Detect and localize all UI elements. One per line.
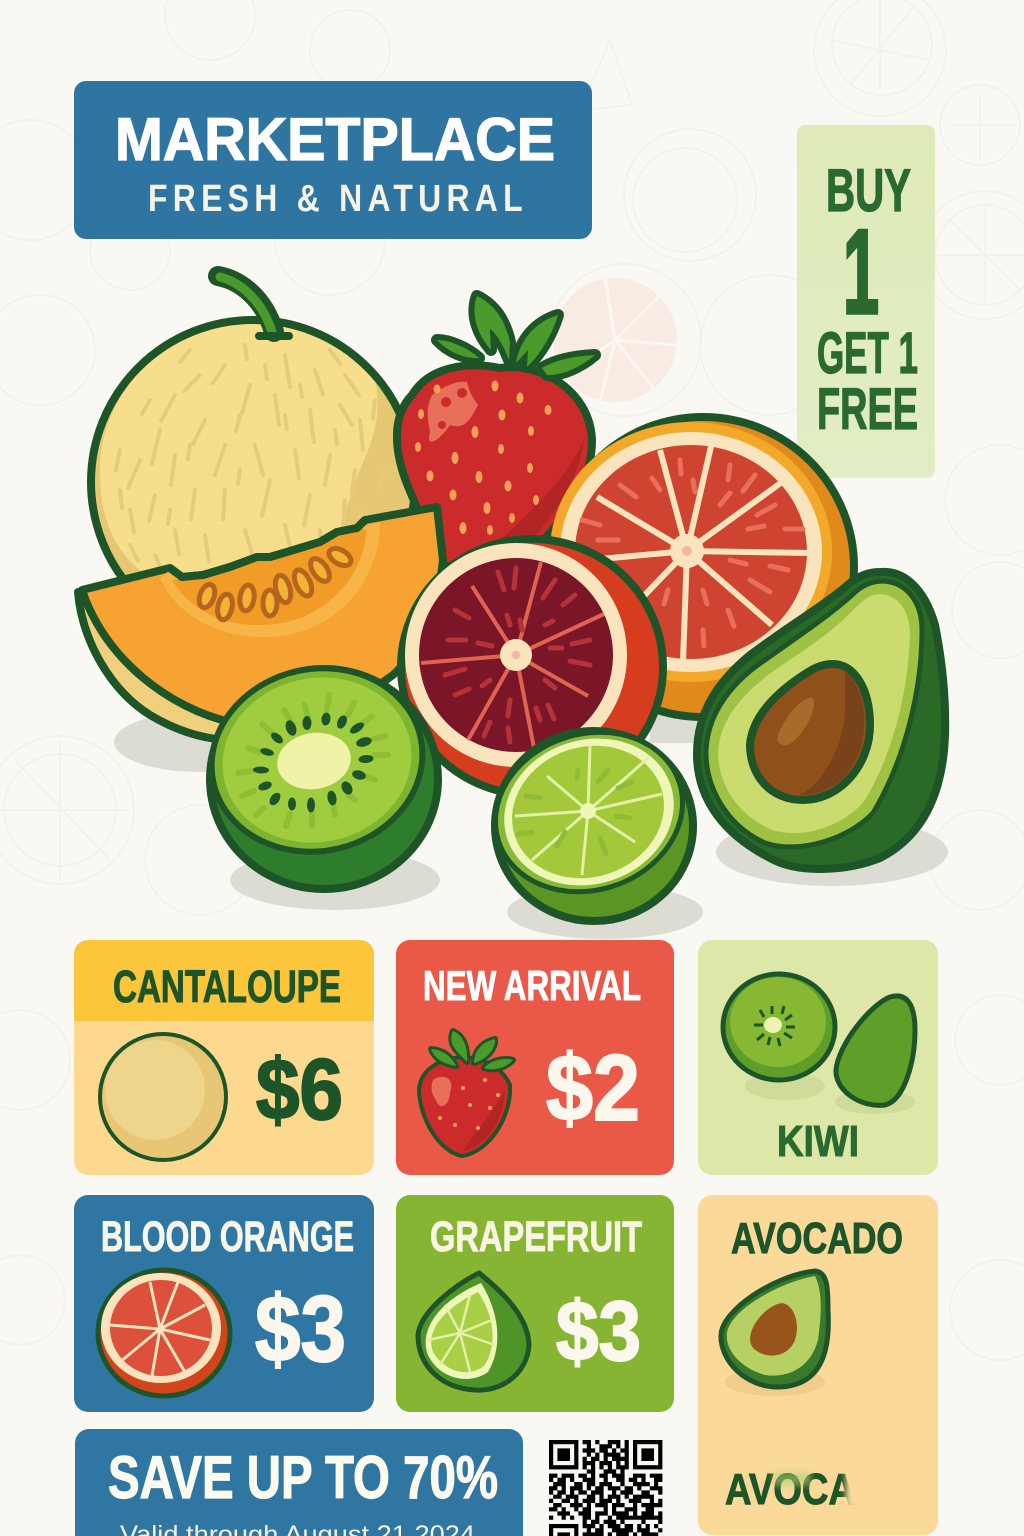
card: grapefruit: GRAPEFRUIT — [430, 1213, 642, 1261]
avocado — [697, 572, 945, 869]
promo badge: buy 1 get 1 free: BUY — [826, 157, 911, 224]
melon seeds — [196, 545, 354, 621]
icon: kiwi and avocado — [723, 974, 915, 1114]
card: new arrival — [396, 940, 674, 1175]
header banner — [74, 81, 592, 239]
card: grapefruit — [396, 1195, 674, 1412]
card: cantaloupe: CANTALOUPE — [113, 961, 341, 1012]
icon: lime wedge — [418, 1273, 529, 1390]
card: blood orange — [74, 1195, 374, 1412]
glitched label: AVOCA: AVOCA — [725, 1465, 855, 1514]
grapefruit — [550, 417, 854, 717]
icon: cantaloupe — [100, 1034, 226, 1160]
kiwi seeds — [253, 712, 374, 812]
strawberry — [397, 296, 595, 575]
kiwi — [194, 649, 440, 889]
icon: strawberry leaves — [437, 296, 595, 375]
card: cantaloupe — [74, 940, 374, 1175]
save banner: SAVE UP TO 70% — [108, 1444, 498, 1511]
card: blood orange: BLOOD ORANGE — [101, 1213, 354, 1261]
card: cantaloupe: $6 — [256, 1042, 343, 1138]
hero fruit shadows — [114, 712, 948, 939]
icon: melon stem — [218, 276, 293, 340]
card: blood orange: $3 — [255, 1276, 346, 1381]
card: kiwi: KIWI — [777, 1117, 859, 1166]
cantaloupe slice — [78, 507, 443, 740]
blood orange — [401, 539, 663, 795]
QR code — [549, 1440, 662, 1536]
card: avocado — [698, 1195, 938, 1535]
subtitle: FRESH & NATURAL: FRESH & NATURAL — [148, 177, 523, 220]
title: MARKETPLACE: MARKETPLACE — [115, 106, 555, 173]
promo badge: buy 1 get 1 free: 1 — [843, 205, 879, 339]
card: grapefruit: $3 — [556, 1284, 641, 1378]
card: avocado: AVOCADO — [731, 1214, 903, 1263]
promo badge: buy 1 get 1 free: FREE — [817, 377, 918, 442]
icon: avocado half — [721, 1271, 828, 1396]
lime — [475, 708, 703, 921]
icon: strawberry — [419, 1031, 513, 1156]
cantaloupe whole — [87, 266, 413, 578]
icon: blood orange slice — [98, 1270, 230, 1396]
promo badge: buy 1 get 1 free — [797, 125, 935, 478]
promo badge: buy 1 get 1 free: GET 1 — [817, 321, 918, 386]
card: new arrival: NEW ARRIVAL — [423, 962, 641, 1009]
card: new arrival: $2 — [546, 1035, 640, 1140]
save banner — [75, 1429, 523, 1536]
card: kiwi — [698, 940, 938, 1175]
faint grapefruit watermark — [553, 278, 677, 402]
